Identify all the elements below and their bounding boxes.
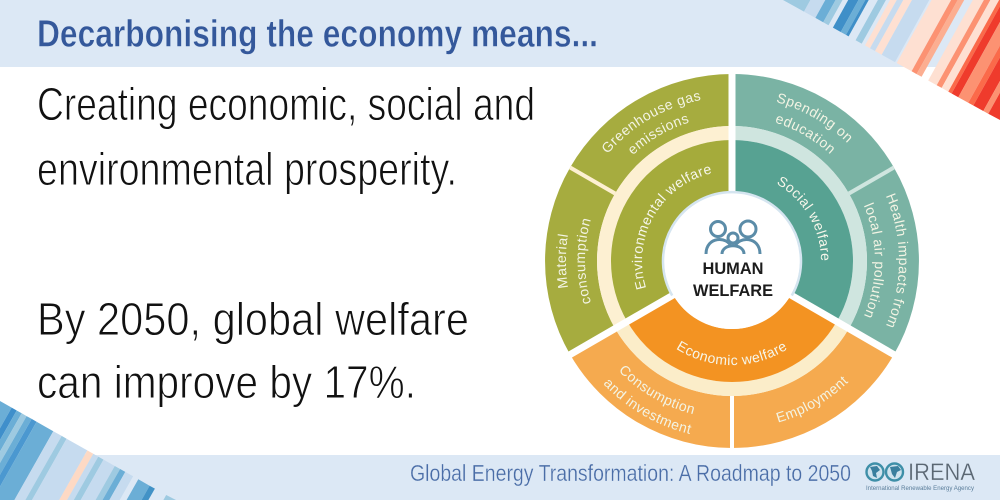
label: environmental welfare: Environmental welfare [632,166,711,290]
inner segment: social welfare [732,140,853,322]
segment: employment [732,328,894,448]
text block: prosperity [37,78,535,195]
label: material: Material [556,234,568,288]
label: education: education [776,116,834,154]
inner segment: environmental welfare [611,140,732,322]
header banner [0,0,1000,67]
label: and investment: and investment [604,380,692,434]
climate stripes: bottom left [0,401,176,500]
wheel chart: human welfare [545,74,919,448]
label: human welfare: HUMAN [702,259,764,278]
footer source text: Global Energy Transformation: A Roadmap to 2050 [410,460,851,486]
label: consumption and: Consumption [620,366,694,414]
label: employment: Employment [776,376,848,422]
label: consumption: consumption [576,218,591,304]
footer banner [0,455,1000,500]
text block: 2050 welfare [37,293,469,408]
icon: people [706,221,760,254]
centre circle [664,193,800,329]
inner segment: economic welfare [627,295,837,382]
segment: health impacts [849,168,919,354]
label: social welfare: Social welfare [778,177,828,260]
segment: consumption and investment [570,328,732,448]
segment: spending on education [732,74,894,194]
light ring: environmental [597,126,732,328]
title: Decarbonising the economy means... [37,14,598,56]
label: emissions: emissions [630,116,688,154]
segment: greenhouse gas emissions [570,74,732,194]
label: human welfare: WELFARE [693,281,773,300]
label: human welfare [693,259,773,300]
segment: material consumption [545,168,615,354]
label: local air pollution: local air pollution [864,202,885,318]
label: greenhouse gas: Greenhouse gas [602,93,700,152]
text block: prosperity: environmental prosperity. [37,143,457,195]
text block: prosperity: Creating economic, social and [37,78,535,130]
label: health impacts from: Health impacts from [886,193,908,328]
light ring: economic [615,322,849,396]
label: spending on: Spending on [777,94,852,143]
IRENA tagline: International Renewable Energy Agency [866,486,974,492]
icon: globes [866,464,903,480]
IRENA logo [866,459,975,492]
label: economic welfare: Economic welfare [676,340,786,366]
IRENA wordmark: IRENA [908,459,975,486]
text block: 2050 welfare: can improve by 17%. [37,356,416,408]
climate stripes: top right [783,0,1000,120]
text block: 2050 welfare: By 2050, global welfare [37,293,469,345]
light ring: social [732,126,867,328]
